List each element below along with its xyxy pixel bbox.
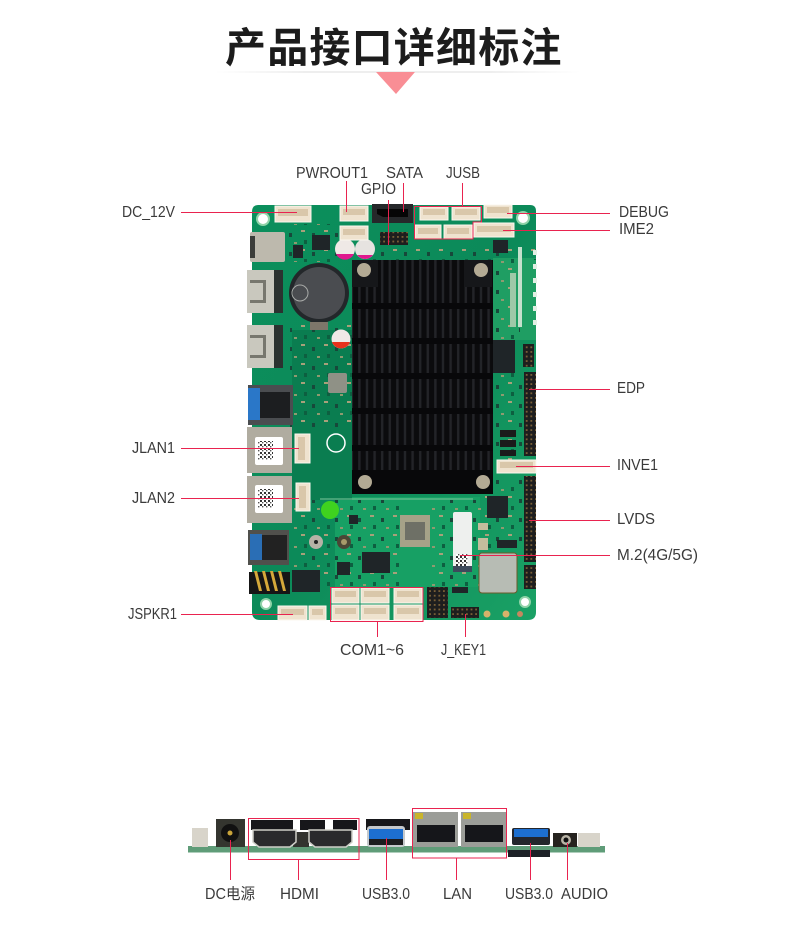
edge notches bbox=[533, 250, 537, 325]
dark chips bbox=[292, 235, 517, 593]
M.2 sticker bbox=[453, 512, 472, 572]
wifi module bbox=[479, 553, 517, 593]
pin headers bbox=[380, 232, 536, 618]
labels, top view: DC_12V bbox=[122, 204, 176, 221]
labels, edge view: USB3.0 bbox=[505, 886, 553, 903]
labels, top view: LVDS bbox=[617, 511, 655, 528]
callout leader lines and boxes, edge view bbox=[230, 808, 568, 880]
USB connector lower bbox=[248, 530, 289, 565]
labels, top view: IME2 bbox=[619, 221, 654, 238]
LAN ports bbox=[413, 812, 506, 847]
board edge view bbox=[188, 812, 605, 857]
USB port bbox=[366, 819, 410, 847]
audio jack bbox=[553, 833, 577, 847]
labels, edge view: LAN bbox=[443, 886, 472, 903]
labels, top view: COM1~6 bbox=[340, 642, 404, 659]
crystals bbox=[478, 523, 488, 550]
PCB strip bbox=[188, 846, 605, 852]
labels, top view bbox=[122, 165, 698, 659]
HDMI red box bbox=[248, 818, 359, 860]
no-lead mark bbox=[327, 434, 345, 452]
labels, top view: DEBUG bbox=[619, 204, 669, 221]
surface-mount component texture bbox=[285, 224, 536, 590]
thin trace bbox=[320, 498, 473, 500]
HDMI connectors bbox=[247, 270, 283, 368]
pink triangle marker bbox=[376, 72, 415, 94]
type-C connector bbox=[250, 232, 285, 262]
inductor bbox=[328, 373, 347, 393]
labels, top view: JSPKR1 bbox=[128, 606, 177, 623]
labels, edge view: HDMI bbox=[280, 886, 319, 903]
labels, edge view: DC电源 bbox=[205, 885, 255, 903]
JUSB red box bbox=[414, 206, 482, 239]
labels, top view: SATA bbox=[386, 165, 424, 182]
left white connector bbox=[192, 828, 208, 847]
callout leader lines and boxes, top view bbox=[181, 181, 610, 637]
heatsink bbox=[352, 260, 493, 494]
title: 产品接口详细标注 bbox=[225, 14, 563, 74]
battery bbox=[289, 263, 349, 330]
labels, top view: JLAN2 bbox=[132, 490, 175, 507]
COM red box bbox=[330, 588, 423, 622]
round sockets bbox=[309, 535, 351, 549]
labels, edge view: USB3.0 bbox=[362, 886, 410, 903]
labels, top view: JLAN1 bbox=[132, 440, 175, 457]
board base bbox=[252, 205, 536, 620]
labels, edge view: AUDIO bbox=[561, 886, 608, 903]
HDMI ports bbox=[251, 820, 357, 847]
antenna sockets bbox=[484, 610, 523, 618]
labels, top view: GPIO bbox=[361, 181, 396, 198]
flex connector strip bbox=[518, 247, 522, 327]
jumpers bbox=[500, 430, 516, 456]
mounting holes bbox=[257, 213, 269, 225]
green OK sticker bbox=[321, 501, 339, 519]
labels, top view: INVE1 bbox=[617, 457, 658, 474]
USB port right bbox=[508, 828, 550, 857]
labels, top view: EDP bbox=[617, 380, 645, 397]
capacitors bbox=[332, 239, 375, 348]
USB connector upper bbox=[248, 385, 293, 425]
SATA socket bbox=[372, 204, 413, 223]
DC jack bbox=[216, 819, 245, 847]
labels, edge view bbox=[205, 885, 608, 903]
audio gold pins bbox=[249, 571, 290, 594]
LAN connectors with QR stickers bbox=[247, 427, 292, 523]
SIM slot bbox=[400, 515, 430, 547]
circuit board top view bbox=[247, 204, 537, 620]
labels, top view: J_KEY1 bbox=[441, 642, 486, 659]
right white connector bbox=[578, 833, 600, 847]
title underline bbox=[215, 72, 580, 73]
LAN red box bbox=[412, 808, 506, 858]
white connectors bbox=[275, 205, 536, 620]
labels, top view: JUSB bbox=[446, 165, 480, 182]
labels, top view: M.2(4G/5G) bbox=[617, 547, 698, 564]
labels, top view: PWROUT1 bbox=[296, 165, 368, 182]
screws bbox=[357, 263, 371, 277]
